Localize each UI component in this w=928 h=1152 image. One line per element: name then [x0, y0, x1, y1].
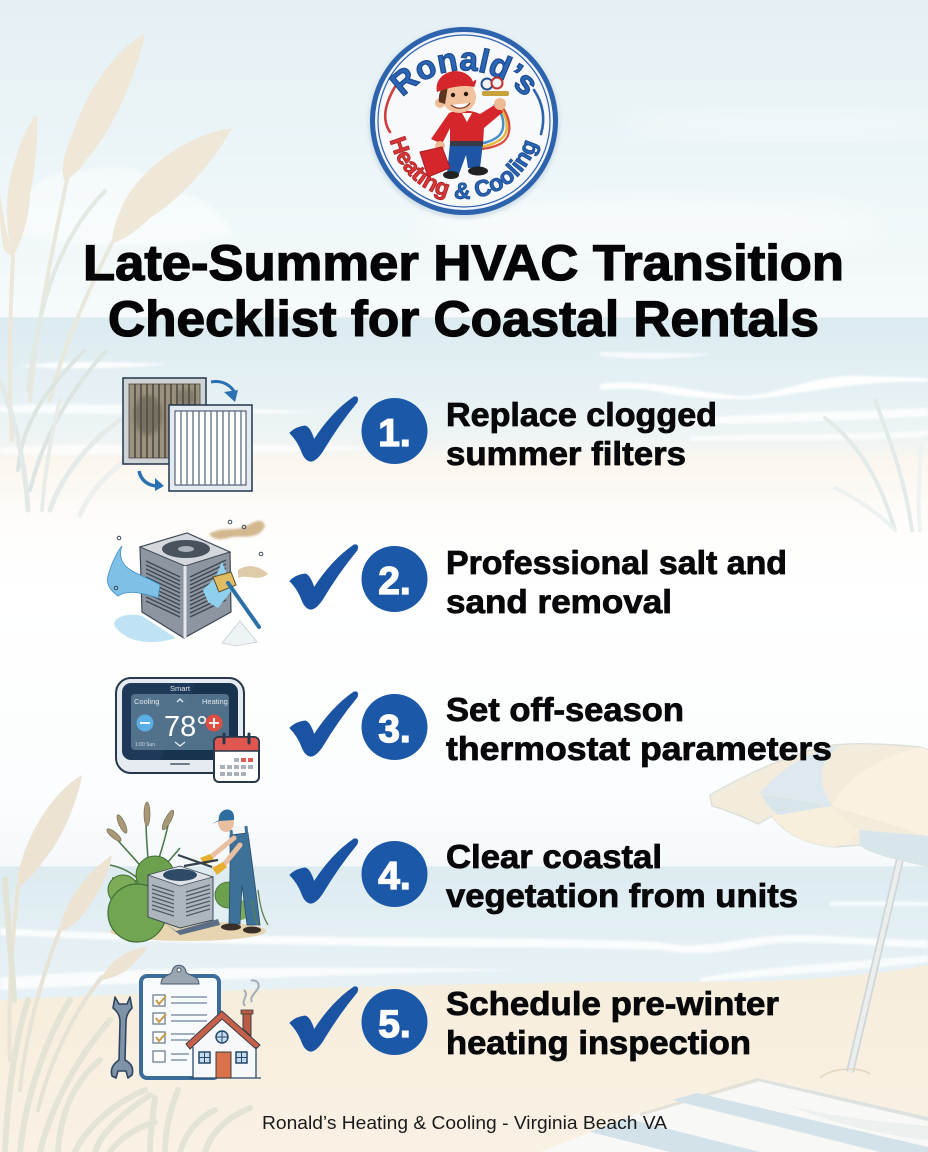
- footer: Ronald’s Heating & Cooling - Virginia Beach VA: [262, 1113, 667, 1133]
- background: lower-left plumes: [18, 775, 147, 980]
- text: item 4: vegetation from units: [446, 877, 798, 914]
- icon: smart thermostat and calendar: Heating: [202, 697, 228, 706]
- text: item 3: thermostat parameters: [446, 730, 832, 767]
- logo: Ronald's Heating & Cooling badge: [368, 26, 560, 220]
- background: beach umbrella: [710, 744, 928, 1078]
- number badge 5: 5.: [378, 1003, 411, 1046]
- number badge 4: [362, 841, 428, 907]
- text: item 1: [446, 396, 717, 472]
- panel: item 4 clear vegetation: [105, 802, 798, 942]
- title: Checklist for Coastal Rentals: [108, 291, 819, 347]
- number badge 1: [362, 398, 428, 464]
- background: upper sea waves: [0, 352, 928, 455]
- text: item 3: Set off-season: [446, 691, 684, 728]
- number badge 3: [362, 694, 428, 760]
- icon: smart thermostat and calendar: Smart: [170, 684, 191, 693]
- icon: filter swap: [123, 378, 252, 491]
- logo mascot: [420, 71, 509, 179]
- background: right-side faint grass: [825, 400, 922, 530]
- title: [83, 235, 844, 347]
- icon: smart thermostat and calendar: Cooling: [134, 697, 159, 706]
- check mark 2: [290, 545, 358, 609]
- panel: item 5 heating inspection: [111, 965, 779, 1078]
- background: clouds: [0, 111, 928, 255]
- background: upper-left plumes: [0, 34, 232, 257]
- text: item 4: Clear coastal: [446, 838, 662, 875]
- panel: item 2 salt and sand removal: [107, 520, 787, 646]
- background: upper-left dune grass: [0, 175, 140, 515]
- check mark 4: [290, 839, 358, 903]
- text: item 2: sand removal: [446, 583, 672, 620]
- panel: item 3 thermostat: [116, 678, 832, 782]
- logo wordmark: & Cooling: [454, 140, 540, 200]
- number badge 3: 3.: [378, 708, 411, 751]
- text: item 5: [446, 985, 779, 1061]
- icon: technician trimming plants around unit: [105, 802, 268, 942]
- background: lower sea waves: [0, 901, 928, 990]
- text: item 3: [446, 691, 832, 767]
- text: item 2: [446, 544, 787, 620]
- text: item 4: [446, 838, 798, 914]
- background: sand: [0, 965, 928, 1152]
- icon: smart thermostat and calendar: 1:00 Sun: [135, 742, 155, 748]
- number badge 2: [362, 546, 428, 612]
- icon: cleaning outdoor AC unit: [107, 520, 268, 646]
- icon: smart thermostat and calendar: 78°: [164, 711, 208, 743]
- logo wordmark: Ronald’s: [388, 48, 535, 96]
- check mark 3: [290, 692, 358, 756]
- background: striped beach towel: [540, 1078, 928, 1152]
- text: item 2: Professional salt and: [446, 544, 787, 581]
- text: item 5: Schedule pre-winter: [446, 985, 779, 1022]
- number badge 1: 1.: [378, 412, 411, 455]
- logo wordmark: Heating: [390, 136, 450, 200]
- number badge 2: 2.: [378, 560, 411, 603]
- icon: smart thermostat and calendar: [116, 678, 259, 782]
- text: item 5: heating inspection: [446, 1024, 751, 1061]
- logo wordmark: [388, 48, 540, 200]
- text: item 1: summer filters: [446, 435, 686, 472]
- title: Late-Summer HVAC Transition: [83, 235, 844, 291]
- number badge 5: [362, 989, 428, 1055]
- number badge 4: 4.: [378, 855, 411, 898]
- check mark 5: [290, 987, 358, 1051]
- text: item 1: Replace clogged: [446, 396, 717, 433]
- icon: clipboard, wrench and house: [111, 965, 261, 1078]
- panel: item 1 replace filters: [123, 378, 717, 491]
- check mark 1: [290, 397, 358, 461]
- background: lower-left dune grass: [5, 880, 250, 1152]
